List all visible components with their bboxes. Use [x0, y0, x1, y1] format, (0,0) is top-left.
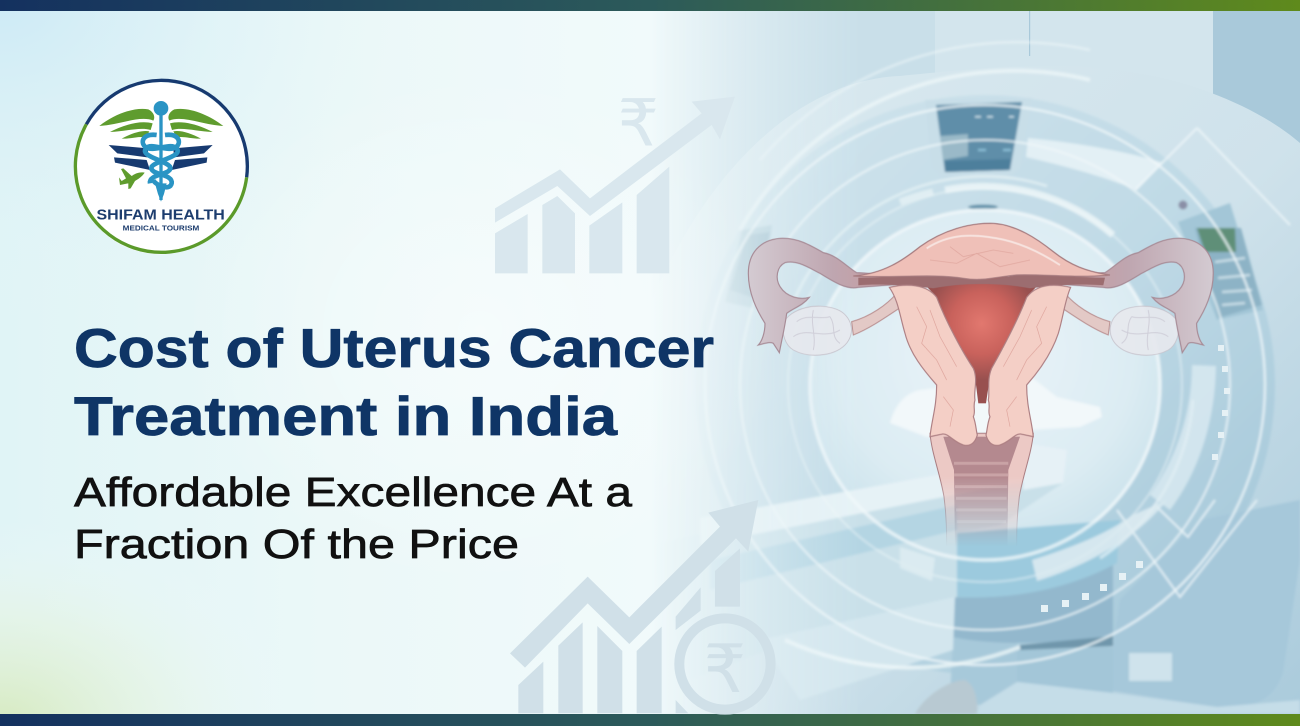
- icon: rising chart with rupee coin, bottom: [510, 500, 771, 713]
- logo name: SHIFAM HEALTH: [96, 207, 225, 223]
- navy wings: [109, 145, 213, 170]
- scanner base: [1113, 500, 1300, 707]
- logo tagline: MEDICAL TOURISM: [123, 225, 200, 232]
- table end: [1022, 452, 1065, 490]
- dark ring band at bottom: [953, 563, 1113, 643]
- right fallopian tube and ovary: [1058, 238, 1213, 355]
- square tick marks: [1041, 345, 1230, 612]
- title: Treatment in India: [74, 385, 617, 447]
- dark gap: [1020, 636, 1113, 650]
- wings green: [99, 109, 223, 139]
- upper display screen: [936, 102, 1022, 172]
- staff top ball: [154, 101, 168, 116]
- scanner outer housing: [705, 72, 1300, 714]
- upper display bezel: [925, 98, 1032, 178]
- tube: [748, 238, 903, 353]
- scanner rear column: [935, 11, 975, 72]
- blue bore glow: [957, 520, 1120, 597]
- subtitle: Affordable Excellence At a: [74, 469, 632, 515]
- bars: [495, 167, 669, 273]
- subtitle: [74, 469, 632, 567]
- bottom bar: [0, 714, 1300, 726]
- subtitle: Fraction Of the Price: [74, 521, 519, 567]
- table bright strip: [710, 476, 944, 536]
- white glow behind text: [180, 70, 780, 590]
- left control panel: [730, 226, 771, 306]
- logo: Shifam Health Medical Tourism: [75, 80, 247, 254]
- tissue texture: [917, 247, 1047, 427]
- table cushion: [890, 376, 1102, 437]
- bars: [518, 548, 740, 713]
- ribbed lumen: [943, 437, 1020, 550]
- vagina canal: [930, 433, 1033, 550]
- mid base panel: [1017, 647, 1113, 693]
- title: [74, 317, 714, 447]
- concentric HUD rings: [705, 42, 1290, 668]
- laser slit: [968, 205, 998, 209]
- arrow: [510, 500, 758, 668]
- light ring segment upper: [1026, 138, 1163, 190]
- fundus wall: [853, 223, 1110, 279]
- logo ring green: [75, 124, 247, 252]
- fundus highlight: [927, 236, 1060, 265]
- scanner bright panels: [900, 365, 1216, 581]
- table blue strip: [740, 508, 957, 581]
- staff tip: [155, 183, 167, 202]
- logo disc: [75, 82, 247, 254]
- right control panel: [1178, 203, 1263, 320]
- icon: rising chart with rupee, top: [495, 87, 735, 273]
- staff and snake: [143, 113, 179, 200]
- blue glow top left: [0, 0, 420, 320]
- lower table strip: [824, 596, 956, 690]
- top bar: [0, 0, 1300, 11]
- scanner base column: [950, 637, 1017, 705]
- left fallopian tube and ovary: [748, 238, 903, 355]
- ligament: [852, 293, 901, 335]
- illustration: uterus anatomy: [748, 223, 1213, 550]
- indicator light: [1178, 200, 1188, 210]
- rupee sign: ₹: [704, 630, 746, 708]
- right myometrium wall: [986, 285, 1071, 445]
- left myometrium wall: [889, 285, 977, 445]
- scanner bore interior: [809, 209, 1161, 561]
- arrow: [495, 97, 735, 223]
- green glow bottom left: [0, 520, 300, 726]
- scanner floor: [1003, 684, 1300, 714]
- rupee sign: ₹: [618, 87, 659, 162]
- rear wall right: [1213, 11, 1300, 143]
- table support: [915, 680, 977, 714]
- rear wall left: [694, 11, 935, 210]
- rupee coin: [679, 618, 771, 710]
- patient table: [800, 484, 1059, 625]
- scanner ring band: [766, 96, 1275, 673]
- column seam: [1029, 11, 1030, 56]
- MRI scanner machine: [640, 11, 1300, 726]
- airplane: [119, 168, 145, 189]
- uterine cavity: [917, 277, 1047, 403]
- ovary: [783, 306, 851, 355]
- base window: [1129, 653, 1172, 681]
- dark band under fundus: [858, 275, 1105, 288]
- logo ring navy: [86, 80, 247, 177]
- title: Cost of Uterus Cancer: [74, 317, 714, 379]
